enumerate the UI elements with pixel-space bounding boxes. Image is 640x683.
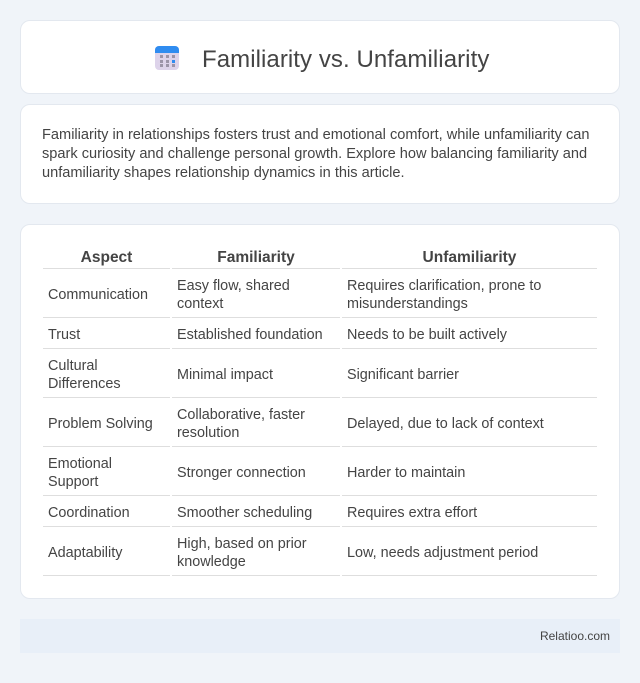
panel: comparison table card <box>20 224 620 599</box>
header: Aspect: Aspect <box>81 249 132 266</box>
row: Emotional Support <box>48 456 112 490</box>
panel: title card <box>20 20 620 94</box>
row: Cultural Differences <box>48 358 121 392</box>
footer bar <box>20 619 620 653</box>
comparison table: misunderstandings <box>347 296 468 312</box>
intro paragraph <box>42 127 589 181</box>
row: Coordination: Coordination <box>48 505 130 521</box>
comparison table: Needs to be built actively <box>347 327 507 343</box>
footer credit: Relatioo.com <box>540 629 610 643</box>
title: Familiarity vs. Unfamiliarity <box>202 46 489 73</box>
row: Adaptability: Adaptability <box>48 545 122 561</box>
row: Communication: Communication <box>48 287 148 303</box>
row: Cultural Differences: Cultural <box>48 358 98 374</box>
comparison table: Stronger connection <box>177 465 306 481</box>
header: Unfamiliarity: Unfamiliarity <box>423 249 516 266</box>
row: Emotional Support: Emotional <box>48 456 112 472</box>
comparison table: Requires extra effort <box>347 505 477 521</box>
comparison table: knowledge <box>177 554 246 570</box>
comparison table: Significant barrier <box>347 367 459 383</box>
intro paragraph: unfamiliarity shapes relationship dynamics in this article. <box>42 165 405 181</box>
row: Cultural Differences: Differences <box>48 376 121 392</box>
intro paragraph: Familiarity in relationships fosters trust and emotional comfort, while unfamiliarity can <box>42 127 589 143</box>
comparison table: Smoother scheduling <box>177 505 312 521</box>
intro paragraph: spark curiosity and challenge personal growth. Explore how balancing familiarity and <box>42 146 587 162</box>
icon: calendar <box>155 46 179 70</box>
comparison table: context <box>177 296 223 312</box>
comparison table: Delayed, due to lack of context <box>347 416 544 432</box>
comparison table: Minimal impact <box>177 367 273 383</box>
header: Familiarity: Familiarity <box>217 249 295 266</box>
comparison table: Established foundation <box>177 327 323 343</box>
comparison table: Harder to maintain <box>347 465 465 481</box>
row: Problem Solving: Problem Solving <box>48 416 153 432</box>
comparison table: Requires clarification, prone to <box>347 278 541 294</box>
comparison table: Easy flow, shared <box>177 278 290 294</box>
row: Emotional Support: Support <box>48 474 98 490</box>
comparison table: resolution <box>177 425 239 441</box>
comparison table: Low, needs adjustment period <box>347 545 538 561</box>
row: Trust: Trust <box>48 327 80 343</box>
panel: intro text <box>20 104 620 204</box>
comparison table: High, based on prior <box>177 536 307 552</box>
comparison table: Collaborative, faster <box>177 407 305 423</box>
